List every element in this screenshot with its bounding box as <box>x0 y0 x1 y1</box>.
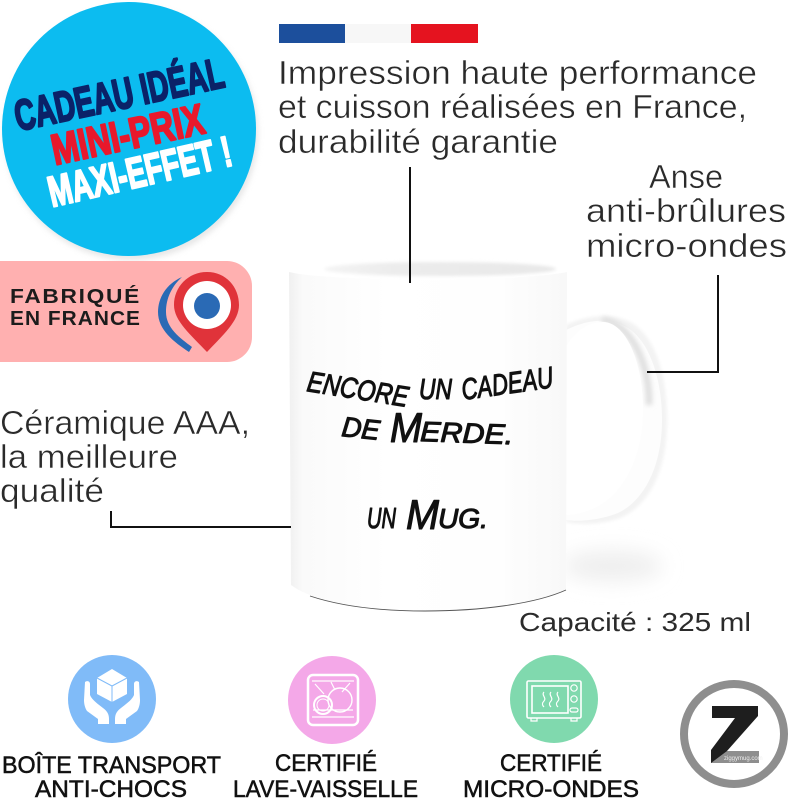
leader line: impression <box>409 167 411 283</box>
label: micro-ondes: CERTIFIÉ <box>500 750 602 777</box>
panel: fabriqué en france <box>0 261 252 362</box>
badge text: mini-prix: MINI-PRIX <box>47 96 209 175</box>
badge text: cadeau idéal: CADEAU IDÉAL <box>10 50 228 141</box>
text: impression: durabilité garantie <box>278 123 558 160</box>
label: boîte transport <box>2 752 221 800</box>
text: impression: et cuisson réalisées en France, <box>278 88 747 125</box>
leader line: anse <box>647 275 718 372</box>
mug slogan: DE <box>340 411 382 446</box>
mug slogan: CADEAU <box>459 361 555 407</box>
text: céramique: la meilleure <box>0 438 178 475</box>
text: céramique: Céramique AAA, <box>0 404 250 441</box>
mug slogan: M <box>390 404 422 451</box>
badge text: maxi-effet: MAXI-EFFET ! <box>43 128 236 217</box>
text: anse: Anse <box>649 158 723 195</box>
mug <box>289 262 667 611</box>
icon: dishwasher <box>288 656 376 744</box>
mug slogan: M <box>406 491 439 538</box>
badge: cadeau idéal <box>2 2 258 260</box>
text: fabriqué en france: FABRIQUÉ <box>10 285 141 308</box>
mug slogan <box>305 361 555 538</box>
label: boîte transport: BOÎTE TRANSPORT <box>2 752 221 779</box>
mug slogan: UN <box>367 503 396 535</box>
leader line: céramique <box>111 511 291 527</box>
icon: french map pin <box>158 272 239 352</box>
mug body <box>289 272 567 611</box>
icon: transport box <box>68 655 156 743</box>
label: lave-vaisselle: CERTIFIÉ <box>275 750 377 777</box>
flag: france <box>279 24 478 43</box>
text: anse <box>586 158 787 264</box>
mug slogan: UN <box>419 374 452 406</box>
text: impression <box>278 54 757 160</box>
mug handle <box>566 316 667 524</box>
label: lave-vaisselle <box>233 750 418 800</box>
mug slogan: ENCORE <box>305 366 411 414</box>
text: anse: anti-brûlures <box>586 192 786 229</box>
label: micro-ondes <box>463 750 639 800</box>
text: impression: Impression haute performance <box>278 54 757 91</box>
text: fabriqué en france <box>10 285 141 330</box>
text: anse: micro-ondes <box>586 227 787 264</box>
mug slogan: UG. <box>438 503 488 534</box>
text: céramique: qualité <box>0 472 104 509</box>
text: fabriqué en france: EN FRANCE <box>10 308 141 330</box>
icon: microwave <box>510 655 598 743</box>
text: capacité: Capacité : 325 ml <box>519 607 751 637</box>
logo: ziggymug: ziggymug.com <box>724 756 763 762</box>
logo: ziggymug <box>684 684 784 784</box>
mug slogan: ERDE. <box>420 416 514 450</box>
text: céramique <box>0 404 250 509</box>
